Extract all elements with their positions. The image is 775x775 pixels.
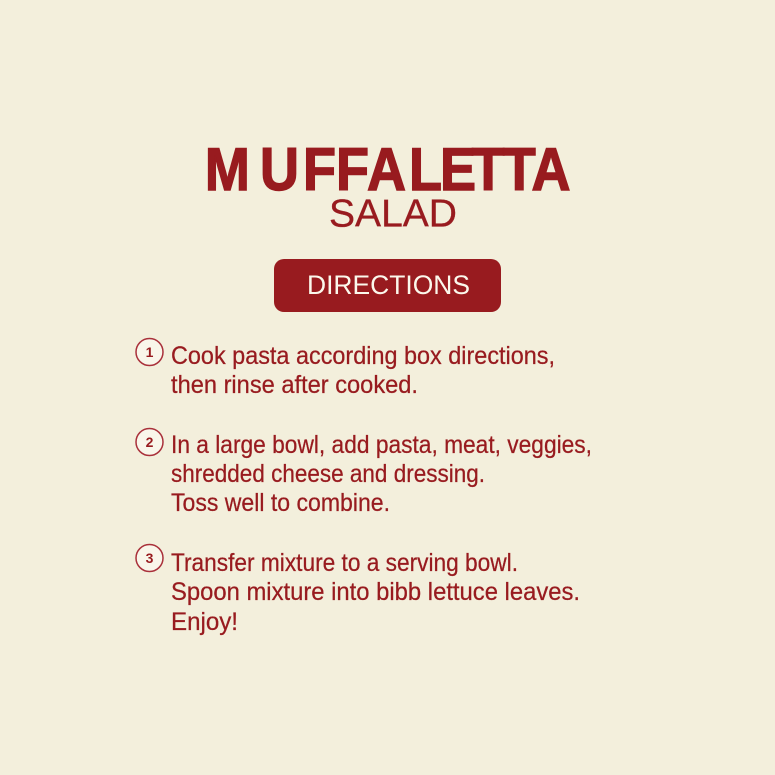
title bbox=[205, 136, 571, 236]
step 2 text: In a large bowl, add pasta, meat, veggies, bbox=[171, 431, 592, 459]
directions badge bbox=[274, 259, 501, 312]
step 2 bbox=[136, 428, 592, 517]
icon: number 1: 1 bbox=[146, 344, 154, 360]
step 1 text: Cook pasta according box directions, bbox=[171, 342, 555, 370]
step 3 bbox=[136, 544, 580, 636]
icon: number 1 bbox=[136, 338, 163, 366]
step 1 text: then rinse after cooked. bbox=[171, 371, 418, 399]
icon: number 2 bbox=[136, 428, 163, 456]
step 2 text: shredded cheese and dressing. bbox=[171, 460, 485, 488]
directions badge: DIRECTIONS bbox=[307, 270, 470, 300]
icon: number 3: 3 bbox=[146, 550, 154, 566]
icon: number 2: 2 bbox=[146, 434, 154, 450]
step 3 text bbox=[171, 549, 580, 636]
step 3 text: Transfer mixture to a serving bowl. bbox=[171, 549, 518, 577]
step 2 text bbox=[171, 431, 592, 517]
title: SALAD bbox=[329, 192, 457, 236]
title: MUFFALETTA bbox=[205, 136, 571, 204]
step 3 text: Enjoy! bbox=[171, 608, 238, 636]
step 2 text: Toss well to combine. bbox=[171, 489, 390, 517]
step 1 text bbox=[171, 342, 555, 399]
icon: number 3 bbox=[136, 544, 163, 572]
step 1 bbox=[136, 338, 555, 399]
step 3 text: Spoon mixture into bibb lettuce leaves. bbox=[171, 578, 580, 606]
